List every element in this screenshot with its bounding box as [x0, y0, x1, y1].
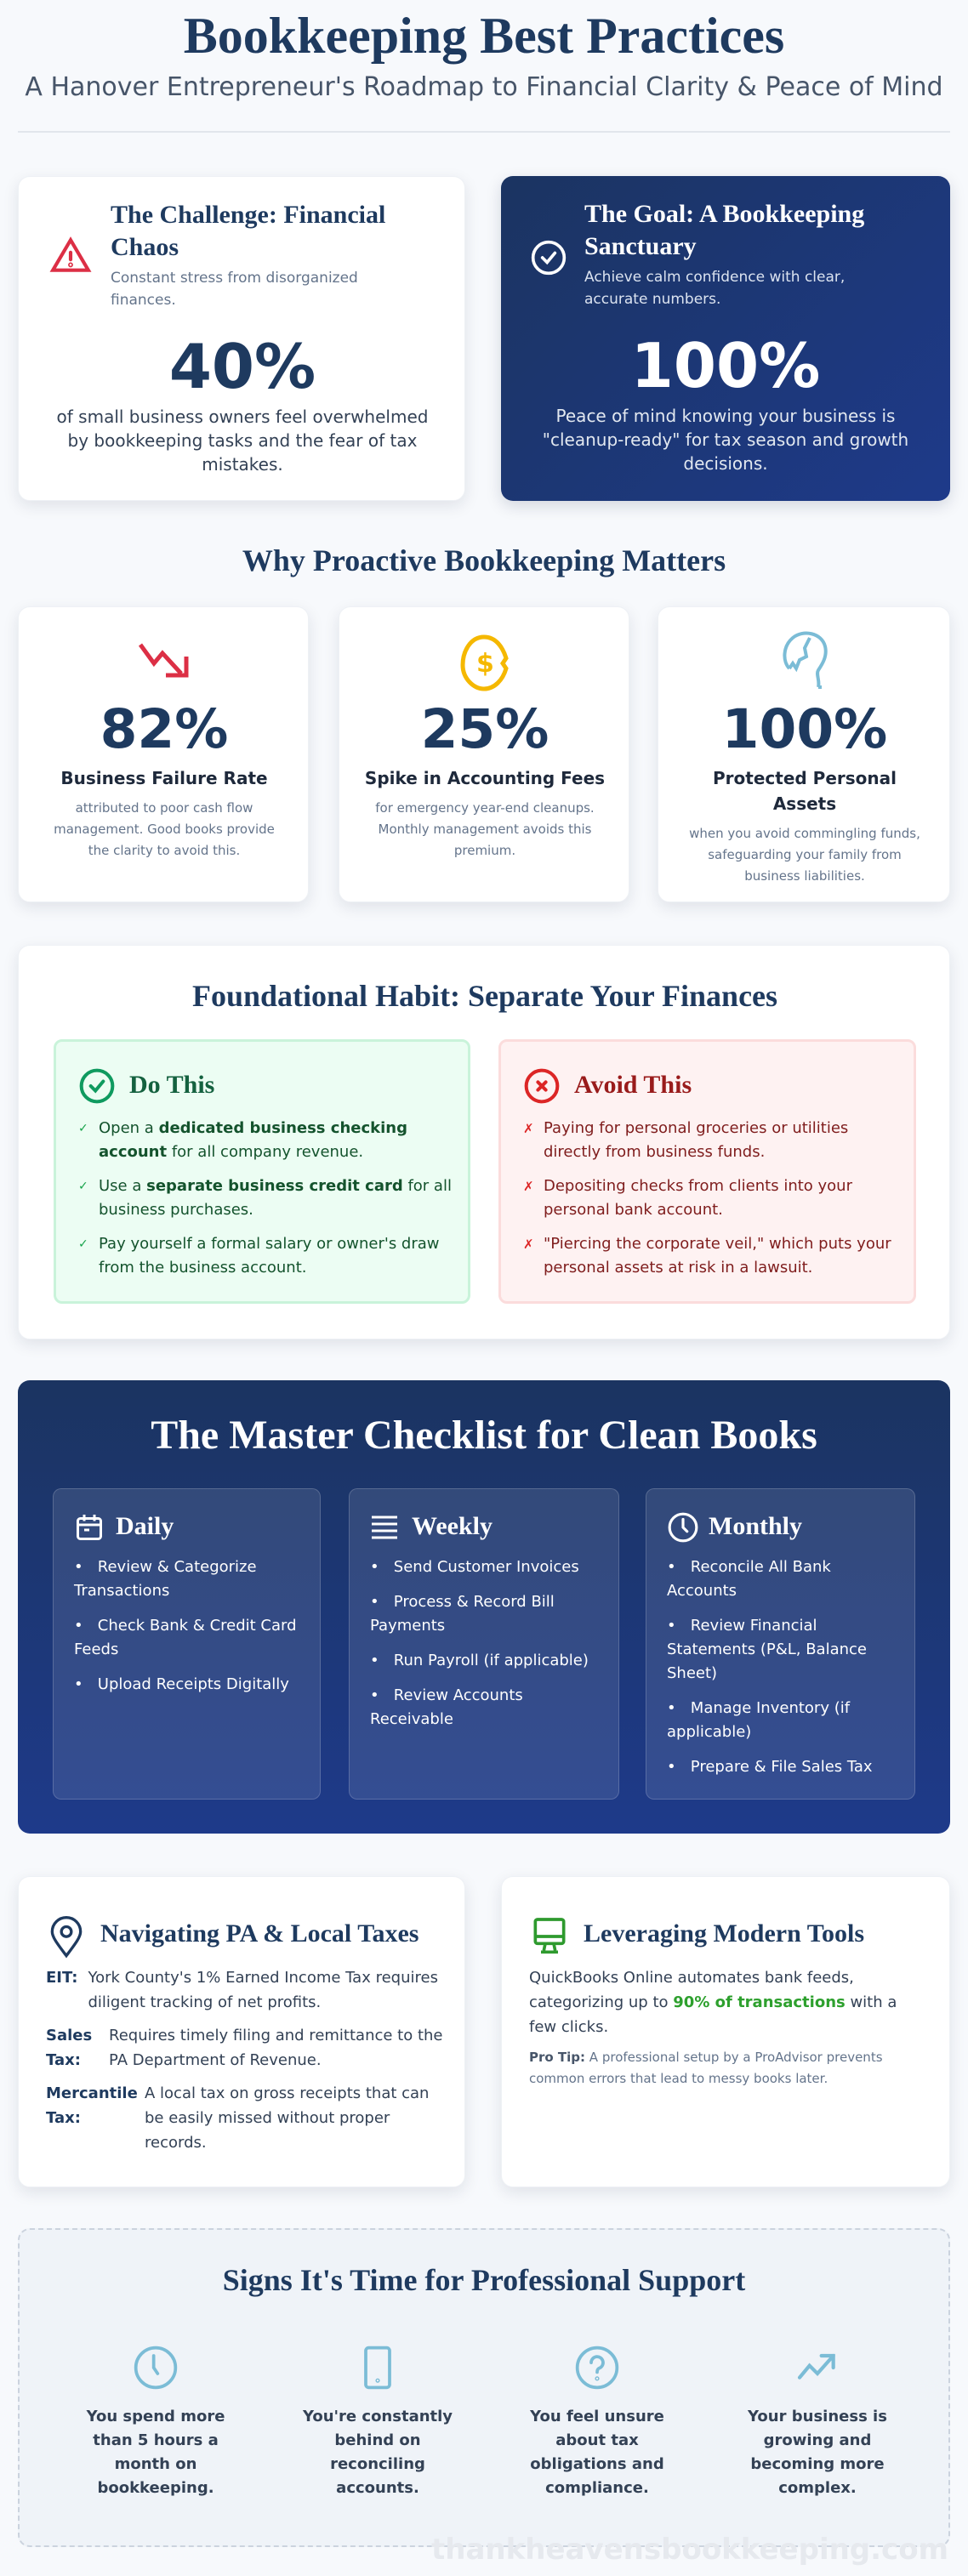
goal heading: The Goal: A Bookkeeping Sanctuary — [584, 200, 864, 260]
avoid list: Paying for personal groceries or utilities directly from business funds. — [544, 1119, 848, 1161]
icon: coin: $ — [476, 649, 494, 679]
subtitle: A Hanover Entrepreneur's Roadmap to Financial Clarity & Peace of Mind — [25, 72, 943, 102]
column: daily — [53, 1488, 321, 1800]
column: monthly — [646, 1488, 915, 1800]
sign 3: You feel unsure about tax obligations and compliance. — [530, 2408, 664, 2497]
items: • Review Financial Statements (P&L, Balance Sheet) — [667, 1617, 867, 1682]
stat card: failure rate — [18, 606, 309, 902]
panel: signs professional support — [18, 2228, 950, 2547]
icon: check circle — [531, 240, 567, 276]
title: Monthly — [709, 1512, 802, 1540]
icon: lines — [372, 1515, 397, 1539]
icon: red x — [524, 1068, 560, 1104]
icon: trend down — [139, 643, 189, 677]
items: • Run Payroll (if applicable) — [370, 1652, 589, 1669]
tax list: A local tax on gross receipts that can be easily missed without proper records. — [145, 2084, 429, 2152]
tax list: Requires timely filing and remittance to the PA Department of Revenue. — [109, 2027, 443, 2069]
items: • Check Bank & Credit Card Feeds — [74, 1617, 297, 1658]
number 100%: 100% — [722, 698, 887, 760]
do heading: Do This — [129, 1071, 214, 1099]
label: Business Failure Rate — [60, 768, 268, 788]
desc: for emergency year-end cleanups. Monthly management avoids this premium. — [375, 800, 595, 858]
sign 4 — [747, 2354, 887, 2497]
panel: challenge — [18, 176, 465, 501]
items: • Upload Receipts Digitally — [74, 1675, 289, 1693]
icon: trend up — [798, 2354, 835, 2380]
challenge heading: The Challenge: Financial Chaos — [111, 201, 385, 261]
goal description: Peace of mind knowing your business is "cleanup-ready" for tax season and growth decisions. — [543, 406, 908, 474]
avoid list: ✗ — [523, 1121, 534, 1136]
panel: modern tools — [501, 1876, 950, 2187]
items — [73, 1558, 297, 1693]
items: • Process & Record Bill Payments — [370, 1593, 555, 1635]
title: Weekly — [412, 1512, 493, 1540]
icon: clock — [134, 2346, 177, 2390]
sign 2: You're constantly behind on reconciling accounts. — [303, 2408, 453, 2497]
do list: ✓ — [78, 1237, 88, 1251]
tax list: Mercantile Tax: — [46, 2084, 138, 2127]
icon: coin — [461, 634, 509, 691]
label: Protected Personal Assets — [713, 768, 897, 814]
body: QuickBooks Online automates bank feeds, categorizing up to 90% of transactions with a few clicks. — [529, 1969, 897, 2036]
avoid list — [523, 1119, 891, 1277]
panel: separate finances — [18, 945, 950, 1339]
challenge subtext: Constant stress from disorganized finances. — [111, 270, 358, 309]
icon: head — [783, 631, 828, 689]
sign 3 — [530, 2346, 664, 2497]
heading: The Master Checklist for Clean Books — [151, 1413, 817, 1458]
panel: master checklist — [18, 1380, 950, 1834]
heading: Leveraging Modern Tools — [584, 1919, 864, 1948]
icon: green check — [80, 1068, 114, 1104]
do list — [78, 1119, 452, 1277]
icon: tablet — [364, 2346, 391, 2390]
panel: PA taxes — [18, 1876, 465, 2187]
panel: goal — [501, 176, 950, 501]
avoid list: "Piercing the corporate veil," which puts your personal assets at risk in a lawsuit. — [544, 1235, 891, 1277]
tax list — [46, 1969, 443, 2152]
box: avoid this — [498, 1039, 916, 1304]
tax list: York County's 1% Earned Income Tax requires diligent tracking of net profits. — [88, 1969, 438, 2011]
stat card: fees — [339, 606, 629, 902]
tax list: Sales Tax: — [46, 2027, 92, 2069]
icon: calendar — [77, 1515, 102, 1540]
title: Bookkeeping Best Practices — [184, 8, 784, 64]
heading: Foundational Habit: Separate Your Finances — [192, 979, 777, 1013]
avoid list: Depositing checks from clients into your personal bank account. — [544, 1177, 852, 1219]
title: Daily — [116, 1512, 174, 1540]
sign 2 — [303, 2346, 453, 2497]
do list: Pay yourself a formal salary or owner's draw from the business account. — [99, 1235, 439, 1277]
sign 4: Your business is growing and becoming more complex. — [748, 2408, 887, 2497]
items: • Manage Inventory (if applicable) — [667, 1699, 850, 1741]
tax list: EIT: — [46, 1969, 78, 1987]
items: • Prepare & File Sales Tax — [667, 1758, 873, 1776]
avoid heading: Avoid This — [574, 1071, 692, 1099]
heading: Signs It's Time for Professional Support — [223, 2263, 745, 2297]
avoid list: ✗ — [523, 1179, 534, 1194]
sign 1: You spend more than 5 hours a month on bookkeeping. — [87, 2408, 225, 2497]
stat description: of small business owners feel overwhelmed by bookkeeping tasks and the fear of tax mistakes. — [57, 407, 428, 475]
items: • Review & Categorize Transactions — [74, 1558, 257, 1600]
pro tip: Pro Tip: A professional setup by a ProAdvisor prevents common errors that lead to messy books later. — [529, 2050, 883, 2086]
avoid list: ✗ — [523, 1237, 534, 1252]
do list: Open a dedicated business checking account for all company revenue. — [99, 1119, 407, 1161]
stat 40%: 40% — [169, 331, 316, 402]
number 82%: 82% — [100, 698, 228, 760]
stat card: protected assets — [658, 606, 950, 902]
goal subtext: Achieve calm confidence with clear, accurate numbers. — [584, 269, 845, 308]
desc: attributed to poor cash flow management. Good books provide the clarity to avoid this. — [54, 800, 275, 858]
items: • Reconcile All Bank Accounts — [667, 1558, 831, 1600]
icon: monitor — [534, 1918, 565, 1954]
stat 100%: 100% — [631, 330, 820, 401]
watermark: thankheavensbookkeeping.com — [431, 2533, 948, 2567]
items: • Send Customer Invoices — [370, 1558, 579, 1576]
items: • Review Accounts Receivable — [370, 1686, 523, 1728]
icon: warning — [49, 236, 92, 272]
do list: Use a separate business credit card for all business purchases. — [99, 1177, 452, 1219]
items — [370, 1558, 589, 1728]
label: Spike in Accounting Fees — [365, 768, 605, 788]
box: do this — [54, 1039, 470, 1304]
heading: why proactive: Why Proactive Bookkeeping Matters — [242, 543, 726, 577]
heading: Navigating PA & Local Taxes — [100, 1919, 419, 1948]
sign 1 — [87, 2346, 225, 2497]
do list: ✓ — [78, 1122, 88, 1135]
desc: when you avoid commingling funds, safeguarding your family from business liabilities. — [689, 826, 920, 884]
icon: map pin — [51, 1916, 82, 1958]
icon: question — [575, 2346, 619, 2390]
items — [667, 1558, 873, 1776]
do list: ✓ — [78, 1180, 88, 1193]
column: weekly — [349, 1488, 619, 1800]
icon: clock — [669, 1512, 698, 1543]
number 25%: 25% — [421, 698, 549, 760]
